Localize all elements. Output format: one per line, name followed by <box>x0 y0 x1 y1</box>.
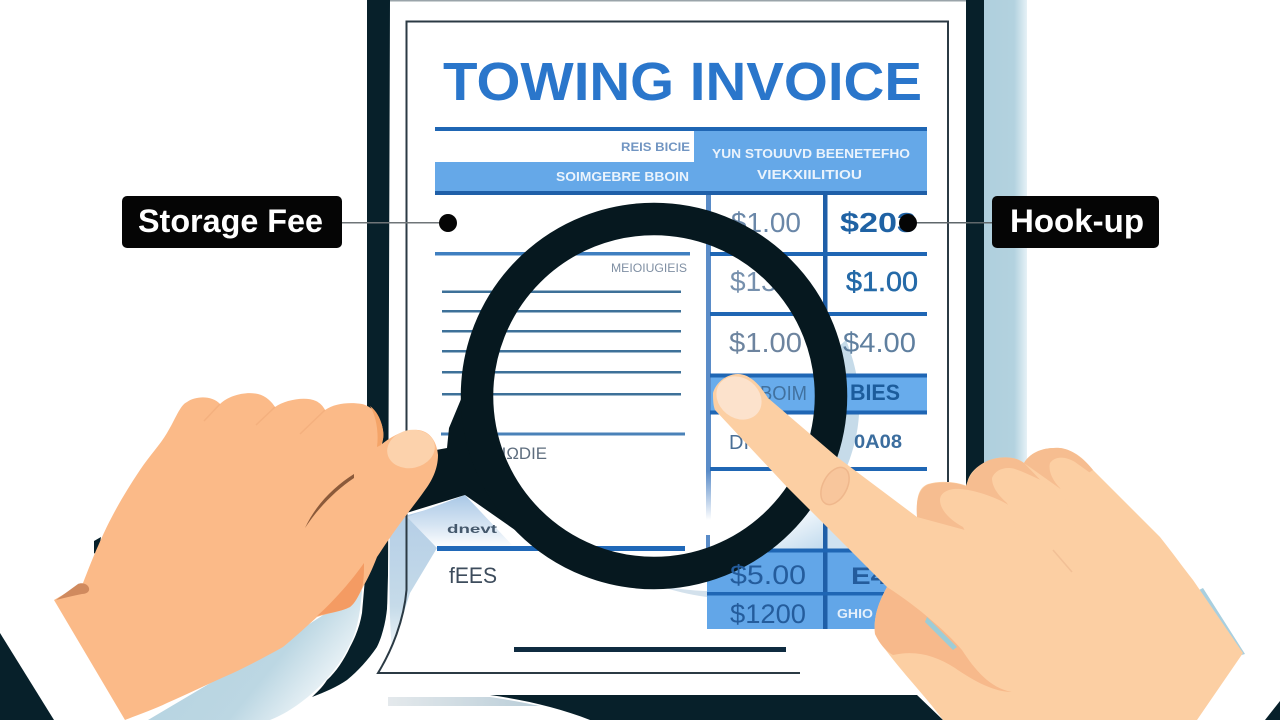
amounts table: $1.00 <box>731 207 801 238</box>
paper sheet <box>330 0 966 706</box>
sleeve sliver between fingers <box>925 617 957 650</box>
shaded index finger edge <box>370 406 383 447</box>
hand outer sliver <box>1195 588 1245 656</box>
knuckle shading <box>917 448 1093 530</box>
signature line <box>514 647 786 652</box>
description column <box>435 252 690 588</box>
magnifying glass <box>400 219 831 573</box>
lens shadow <box>660 340 859 600</box>
description column: dnevt <box>447 522 497 536</box>
amounts table: $4.00 <box>843 327 916 358</box>
thumb nail <box>384 425 438 473</box>
left hand <box>54 393 438 720</box>
magnifier ring <box>477 219 831 573</box>
amounts table: BOIM <box>760 383 807 405</box>
amounts table <box>706 195 927 629</box>
finger lobes <box>940 458 1110 560</box>
left callout: Storage Fee <box>122 196 342 248</box>
table header: REIS BICIE <box>621 142 690 154</box>
amounts table: DI <box>729 432 749 454</box>
description column: MEIOIUGIEIS <box>611 263 687 275</box>
invoice inner border <box>378 22 948 673</box>
amounts table: $203 <box>840 207 916 238</box>
left sleeve shade <box>148 590 362 720</box>
finger creases <box>204 404 325 434</box>
right hand <box>708 367 1245 720</box>
right callout: Hook-up <box>992 196 1159 248</box>
table header: SOIMGEBRE BBOIN <box>556 169 689 184</box>
suit corner right <box>1265 701 1280 720</box>
thumb crease <box>305 474 354 528</box>
amounts table: E4 <box>851 563 888 590</box>
suit corner left <box>0 633 54 720</box>
lower palm shading <box>875 587 1012 692</box>
document backing shadow <box>984 0 1027 470</box>
table header: YUN STOUUVD BEENETEFHO <box>712 146 910 161</box>
description column: IIΩDIE <box>497 444 547 463</box>
amounts table: 0A08 <box>854 432 902 453</box>
magnifier handle <box>400 392 515 530</box>
title: TOWING INVOICE <box>443 52 922 112</box>
left callout leader <box>342 214 457 232</box>
amounts table: $13 <box>730 266 777 297</box>
amounts table: $1.00 <box>729 327 802 358</box>
amounts table: $1.00 <box>846 266 918 297</box>
clipboard dark frame <box>312 0 984 720</box>
right callout: Hook-up: Hook-up <box>1010 203 1144 239</box>
bracelet mark <box>56 583 89 600</box>
shaded palm edge <box>317 563 364 616</box>
back of hand crease <box>1053 550 1072 572</box>
left callout: Storage Fee: Storage Fee <box>138 203 323 239</box>
amounts table: GHIO B <box>837 606 887 621</box>
bottom row amount over ring: $5.00 <box>730 560 806 590</box>
paper fold behind magnifier handle <box>389 495 512 650</box>
amounts table: BIES <box>850 380 900 405</box>
finger nail <box>708 367 770 429</box>
description column: fEES <box>449 563 497 588</box>
table header <box>435 127 927 195</box>
table header: VIEKXIILITIOU <box>757 167 862 182</box>
finger knuckle wrinkle <box>815 463 855 509</box>
right callout leader <box>899 214 993 232</box>
amounts table: $1200 <box>730 599 806 629</box>
